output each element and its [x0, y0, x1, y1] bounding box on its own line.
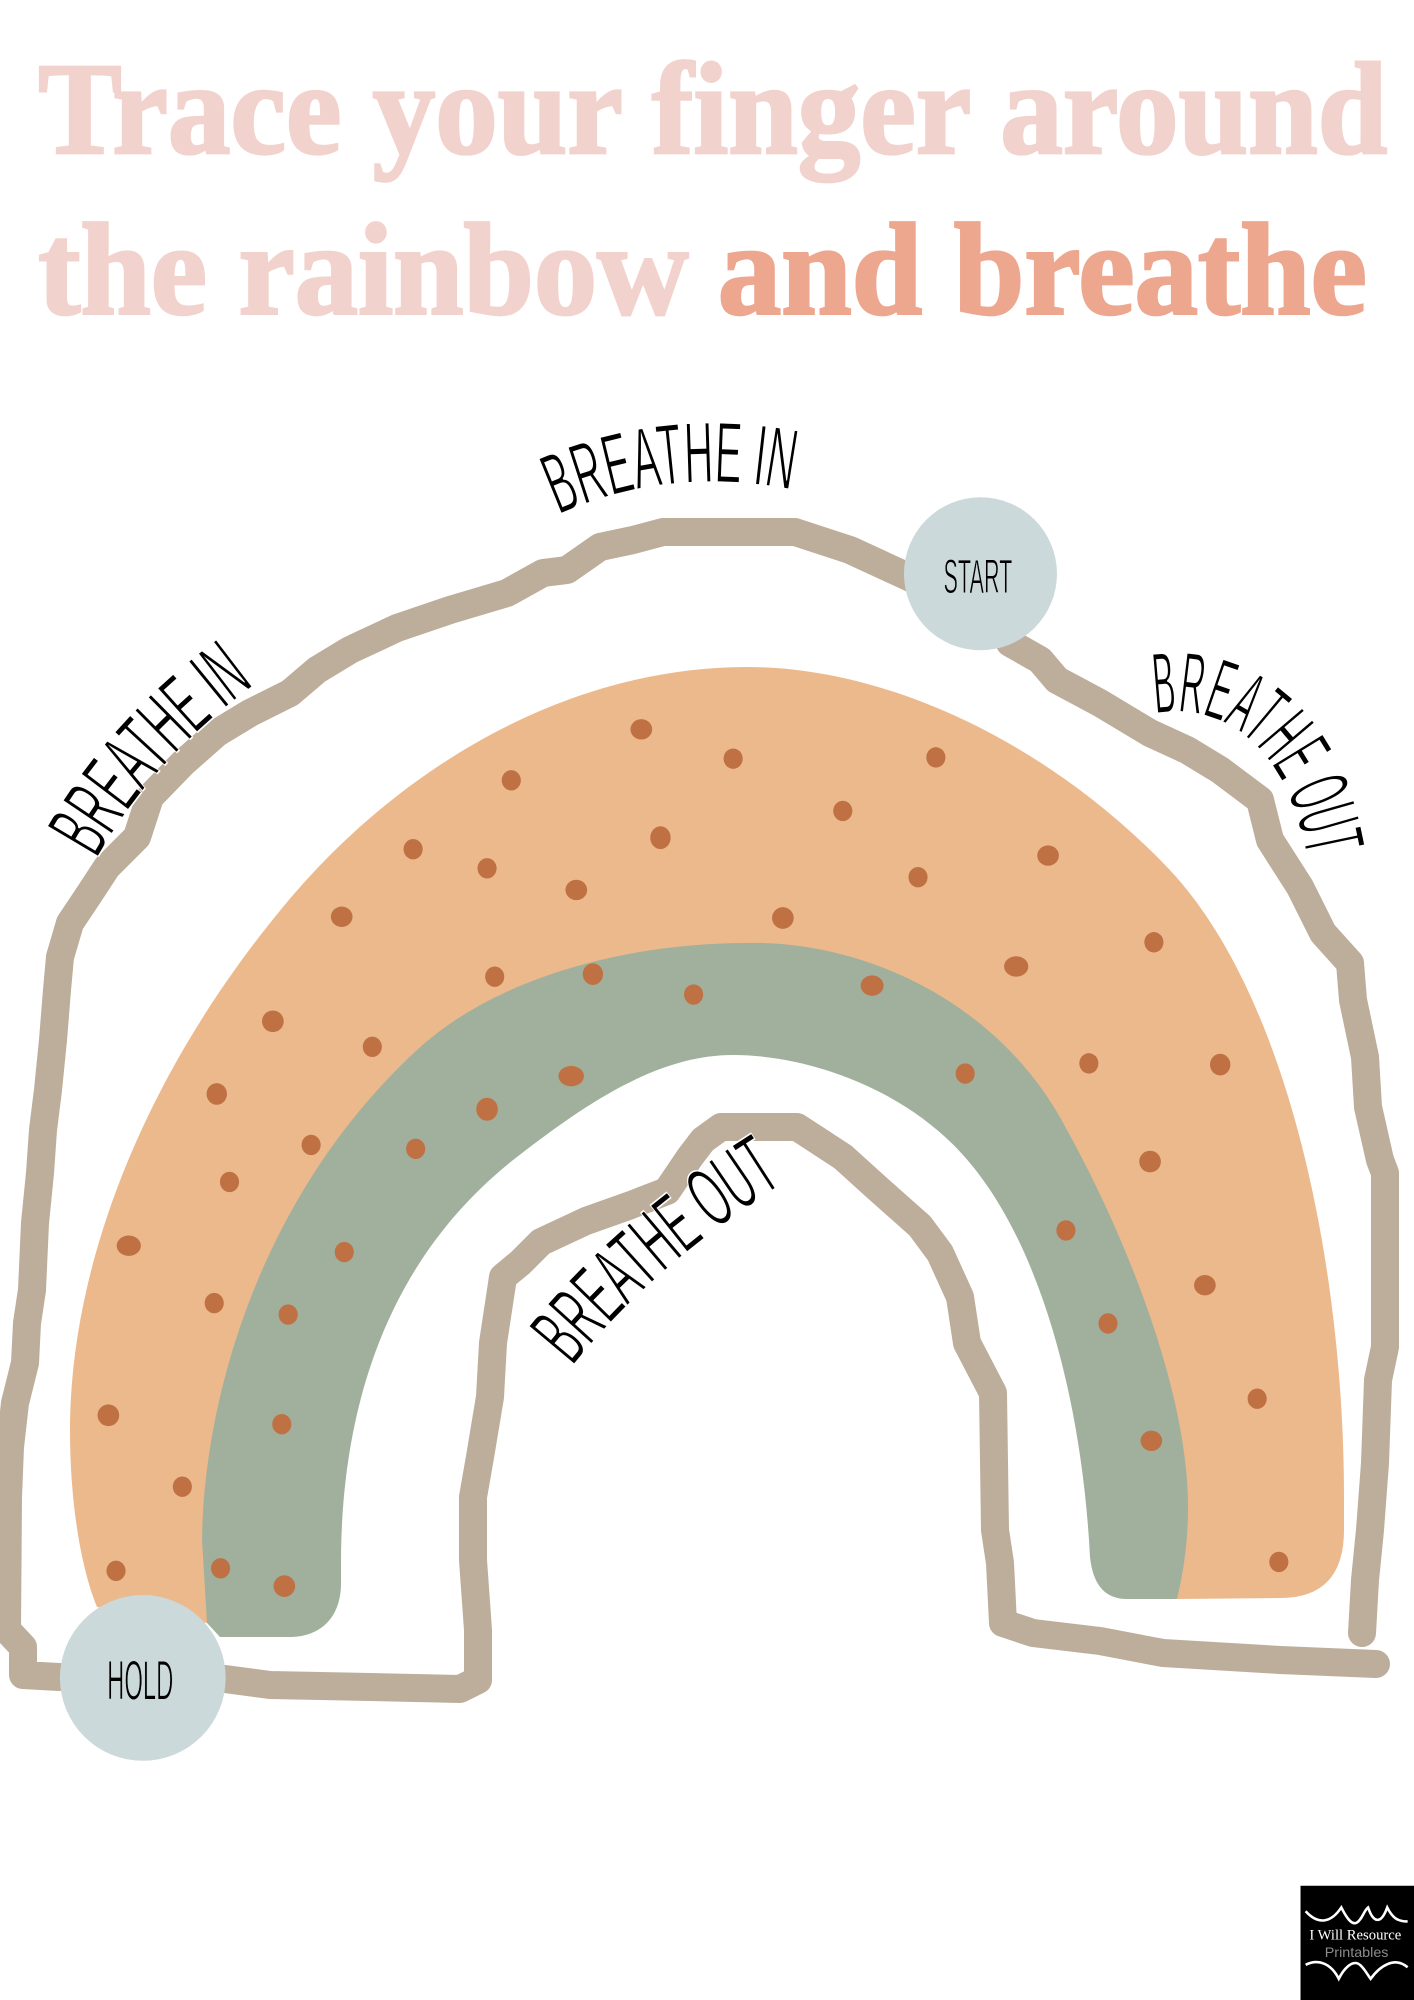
- path: left and top from start to hold: [7, 532, 915, 1677]
- label: breathe out inner: BREATHE OUT: [530, 1132, 775, 1364]
- title: and breathe: [718, 198, 1367, 343]
- label: breathe in left: BREATHE IN: [48, 640, 252, 858]
- dots: [98, 719, 1288, 1597]
- title: Trace your finger around: [38, 37, 1387, 182]
- rainbow: [70, 667, 1344, 1637]
- logo: Printables: [1325, 1945, 1389, 1960]
- start marker: START: [944, 550, 1012, 604]
- path: hold to inner arch and down the right side: [225, 1127, 1376, 1689]
- label: breathe out right: BREATHE OUT: [1153, 654, 1364, 849]
- logo wave bottom: [1306, 1962, 1408, 1979]
- title: [38, 37, 1387, 343]
- green inner arc: [202, 943, 1188, 1637]
- hold marker: HOLD: [107, 1649, 173, 1712]
- orange outer arc: [70, 667, 1344, 1623]
- hold marker: [60, 1595, 226, 1761]
- tracing path: [7, 532, 1385, 1689]
- label: breathe in top: BREATHE IN: [540, 423, 798, 513]
- logo: [1301, 1886, 1414, 2000]
- start marker: [904, 497, 1057, 650]
- path: right side from start down to end: [1010, 643, 1385, 1633]
- title: the rainbow: [38, 198, 689, 343]
- logo text: I Will Resource: [1309, 1927, 1401, 1943]
- logo wave top: [1306, 1907, 1408, 1923]
